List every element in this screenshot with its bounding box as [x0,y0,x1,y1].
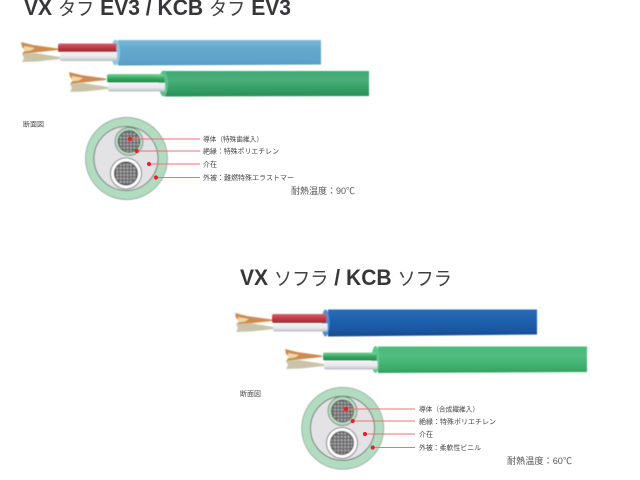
callout text: 外被: 外被：難燃特殊エラストマー [203,173,294,182]
callout text: 介在: 介在 [419,430,433,438]
callout text: 絶縁: 絶縁：特殊ポリエチレン [419,417,496,426]
cross-section diagram 2 [302,387,384,469]
cable photo: bright green sheath cable [285,346,587,373]
callout text: 導体: 導体（合成繊維入） [419,404,479,414]
callout lines and dots 2 [344,407,415,450]
callout text: 導体: 導体（特殊歯維入） [203,134,263,144]
callout text: 絶縁: 絶縁：特殊ポリエチレン [203,146,279,156]
callout text: 介在: 介在 [203,160,217,168]
cable photo: navy blue sheath cable [235,310,537,336]
title: VX ソフラ / KCB ソフラ: VX ソフラ / KCB ソフラ [240,265,452,290]
heat resistance: 90℃: 耐熱温度：90℃ [291,185,355,196]
label: 断面図: 断面図 [240,389,261,398]
cross-section diagram 1 [86,118,168,200]
cable photo: dark green sheath cable [69,70,369,96]
label: 断面図: 断面図 [23,120,44,128]
callout lines and dots 1 [128,137,200,180]
cable photo: blue sheath cable [21,40,321,66]
heat resistance: 60℃: 耐熱温度：60℃ [507,455,572,466]
callout text: 外被: 外被：柔軟性ビニル [419,443,481,452]
